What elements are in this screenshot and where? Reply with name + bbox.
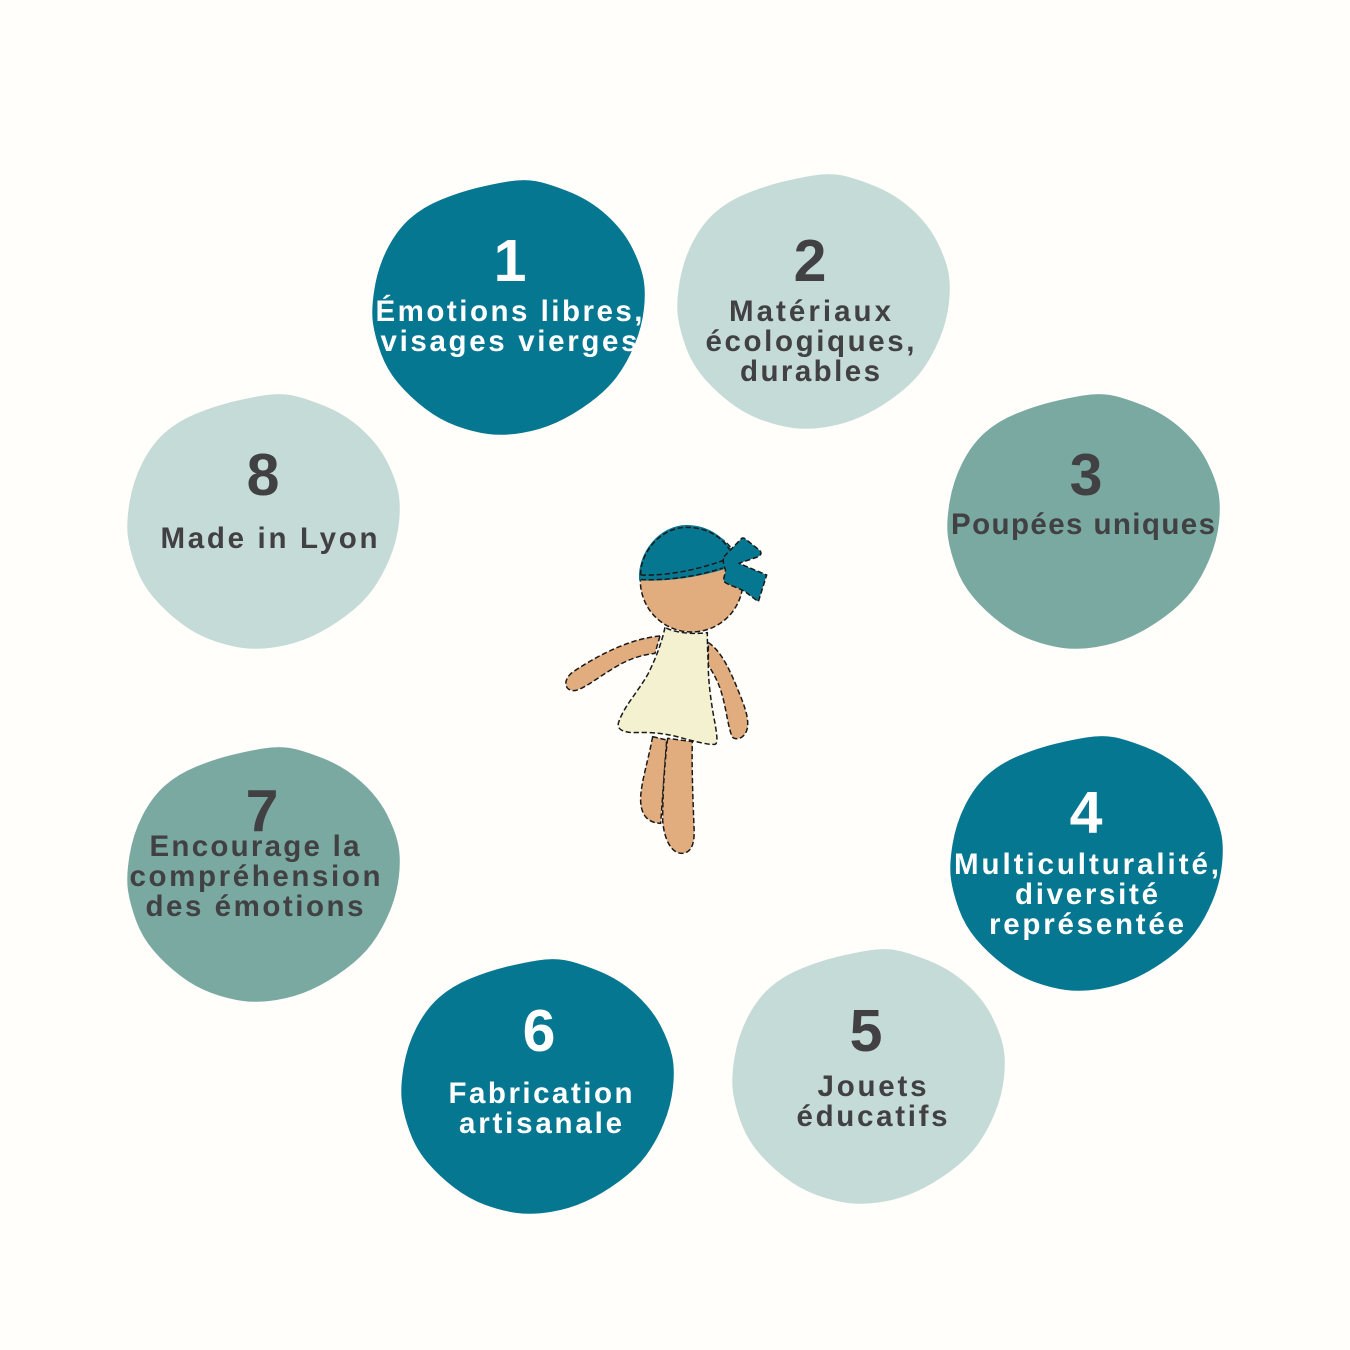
panel: 6 Fabrication artisanale <box>401 959 674 1214</box>
panel: 5 Jouets éducatifs: 5 <box>850 998 882 1064</box>
panel: 3 Poupées uniques <box>947 394 1220 649</box>
panel: 7 Encourage la compréhension des émotions: des émotions <box>146 890 364 923</box>
panel: 2 Matériaux écologiques, durables: durables <box>740 355 880 388</box>
headscarf bow <box>723 538 767 602</box>
front leg <box>663 738 694 853</box>
back leg <box>641 737 667 823</box>
panel: 6 Fabrication artisanale: artisanale <box>459 1107 622 1140</box>
panel: 7 Encourage la compréhension des émotions <box>127 747 400 1002</box>
panel: 1 Émotions libres, visages vierges: Émotions libres, <box>376 294 642 328</box>
head <box>640 529 743 632</box>
panel: 2 Matériaux écologiques, durables: 2 <box>794 228 826 294</box>
headscarf <box>640 526 730 580</box>
panel: 5 Jouets éducatifs: éducatifs <box>796 1100 948 1133</box>
panel: 6 Fabrication artisanale: 6 <box>523 998 555 1064</box>
panel: 3 Poupées uniques: 3 <box>1070 442 1102 508</box>
panel: 4 Multiculturalité, diversité représentée: diversité <box>1015 878 1158 911</box>
panel: 7 Encourage la compréhension des émotions: Encourage la <box>150 830 360 863</box>
panel: 8 Made in Lyon: 8 <box>247 442 279 508</box>
panel: 7 Encourage la compréhension des émotions: 7 <box>246 778 278 844</box>
panel: 3 Poupées uniques: Poupées uniques <box>951 508 1215 541</box>
panel: 1 Émotions libres, visages vierges <box>372 180 645 435</box>
headscarf stitching <box>641 527 729 580</box>
panel: 7 Encourage la compréhension des émotions: compréhension <box>130 860 380 893</box>
panel: 4 Multiculturalité, diversité représentée: Multiculturalité, <box>954 848 1219 881</box>
icon: doll <box>566 526 767 853</box>
panel: 1 Émotions libres, visages vierges: 1 <box>494 228 526 294</box>
panel: 2 Matériaux écologiques, durables: Matériaux <box>729 295 892 328</box>
panel: 1 Émotions libres, visages vierges: visages vierges <box>380 325 638 358</box>
panel: 5 Jouets éducatifs <box>732 949 1005 1204</box>
panel: 4 Multiculturalité, diversité représentée <box>950 736 1223 991</box>
panel: 5 Jouets éducatifs: Jouets <box>818 1070 926 1103</box>
panel: 8 Made in Lyon: Made in Lyon <box>160 522 378 555</box>
panel: 6 Fabrication artisanale: Fabrication <box>448 1077 632 1110</box>
panel: 8 Made in Lyon <box>127 394 400 649</box>
panel: 4 Multiculturalité, diversité représentée: 4 <box>1070 780 1103 846</box>
panel: 2 Matériaux écologiques, durables <box>677 174 950 429</box>
dress <box>618 627 717 744</box>
panel: 2 Matériaux écologiques, durables: écologiques, <box>706 325 914 358</box>
right arm <box>708 643 748 739</box>
panel: 4 Multiculturalité, diversité représentée: représentée <box>989 908 1184 941</box>
left arm <box>566 636 660 691</box>
